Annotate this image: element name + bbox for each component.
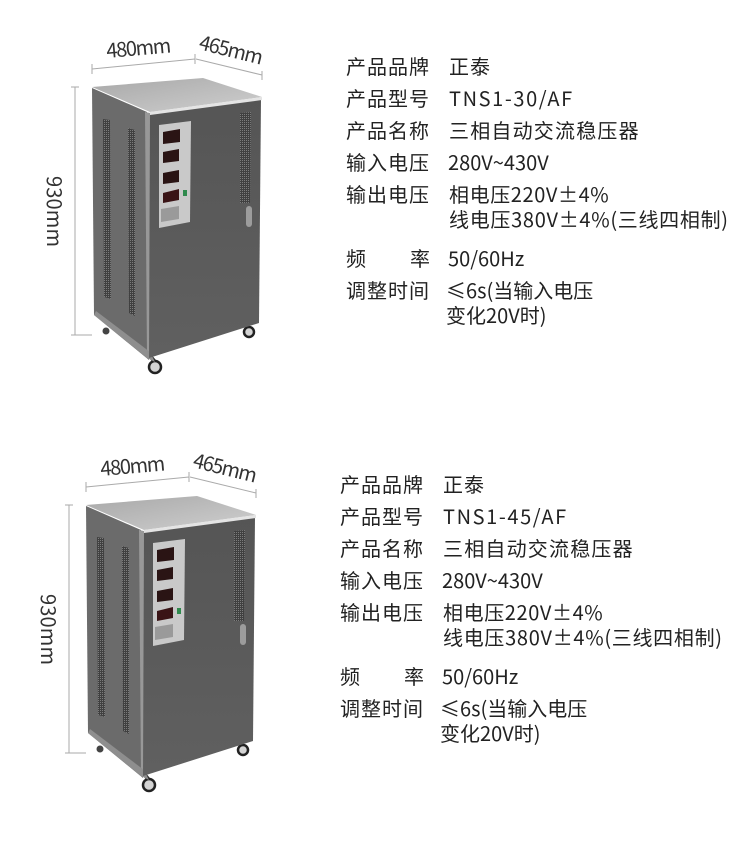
side vents bbox=[103, 119, 135, 316]
spec labels: 输出电压 bbox=[340, 597, 424, 626]
spec values: 线电压380V±4%(三线四相制) bbox=[449, 204, 729, 233]
front vent bbox=[234, 530, 245, 621]
spec labels: 频 bbox=[346, 243, 366, 272]
spec labels: 输出电压 bbox=[346, 179, 430, 208]
spec values: ≤6s(当输入电压 bbox=[440, 693, 587, 722]
spec labels: 输入电压 bbox=[340, 565, 424, 594]
side vents bbox=[97, 537, 129, 734]
spec values: 三相自动交流稳压器 bbox=[449, 115, 640, 144]
spec labels: 产品型号 bbox=[340, 501, 424, 530]
spec labels: 率 bbox=[410, 243, 430, 272]
casters bbox=[102, 322, 254, 373]
spec labels: 产品名称 bbox=[346, 115, 430, 144]
dimension label: depth: 465mm bbox=[197, 27, 267, 71]
front vent bbox=[240, 112, 251, 203]
control panel bbox=[153, 539, 185, 646]
spec labels: 产品品牌 bbox=[340, 469, 424, 498]
product block: TNS1-30/AF bbox=[41, 27, 729, 373]
dimension label: width: 480mm bbox=[105, 29, 172, 64]
dimension lines bbox=[71, 54, 262, 335]
control panel bbox=[159, 121, 191, 228]
spec labels: 调整时间 bbox=[346, 275, 430, 304]
dimension label: width: 480mm bbox=[99, 447, 166, 482]
dimension lines bbox=[65, 472, 256, 753]
spec values: 50/60Hz bbox=[442, 661, 518, 690]
spec values: TNS1-45/AF bbox=[443, 501, 568, 530]
spec values: 线电压380V±4%(三线四相制) bbox=[443, 622, 723, 651]
spec values: 相电压220V±4% bbox=[443, 597, 603, 626]
door handle bbox=[240, 624, 246, 645]
spec values: 正泰 bbox=[449, 51, 491, 80]
spec values: TNS1-30/AF bbox=[449, 83, 574, 112]
dimension label: depth: 465mm bbox=[191, 445, 261, 489]
spec labels: 频 bbox=[340, 661, 360, 690]
spec labels bbox=[346, 51, 430, 304]
spec values: 280V~430V bbox=[448, 147, 549, 176]
dimension label: height: 930mm bbox=[35, 594, 64, 665]
dimension label: height: 930mm bbox=[41, 176, 70, 247]
spec labels: 率 bbox=[404, 661, 424, 690]
casters bbox=[96, 740, 248, 791]
cabinet top bbox=[86, 496, 256, 530]
spec labels: 调整时间 bbox=[340, 693, 424, 722]
cabinet front bbox=[143, 516, 255, 776]
spec labels: 产品名称 bbox=[340, 533, 424, 562]
door handle bbox=[246, 206, 252, 227]
spec values: 变化20V时) bbox=[440, 718, 540, 747]
cabinet front bbox=[149, 98, 261, 358]
spec labels: 产品品牌 bbox=[346, 51, 430, 80]
spec values: ≤6s(当输入电压 bbox=[446, 275, 593, 304]
spec labels: 输入电压 bbox=[346, 147, 430, 176]
spec values bbox=[440, 469, 723, 747]
spec values: 变化20V时) bbox=[446, 300, 546, 329]
spec labels bbox=[340, 469, 424, 722]
cabinet side bbox=[92, 88, 149, 360]
cabinet side bbox=[86, 506, 143, 778]
cabinet top bbox=[92, 78, 262, 112]
cabinet illustration bbox=[86, 496, 256, 791]
product block: TNS1-45/AF bbox=[35, 445, 723, 791]
spec values: 50/60Hz bbox=[448, 243, 524, 272]
spec values: 正泰 bbox=[443, 469, 485, 498]
spec values bbox=[446, 51, 729, 329]
cabinet illustration bbox=[92, 78, 262, 373]
spec values: 三相自动交流稳压器 bbox=[443, 533, 634, 562]
spec values: 280V~430V bbox=[442, 565, 543, 594]
spec labels: 产品型号 bbox=[346, 83, 430, 112]
spec values: 相电压220V±4% bbox=[449, 179, 609, 208]
